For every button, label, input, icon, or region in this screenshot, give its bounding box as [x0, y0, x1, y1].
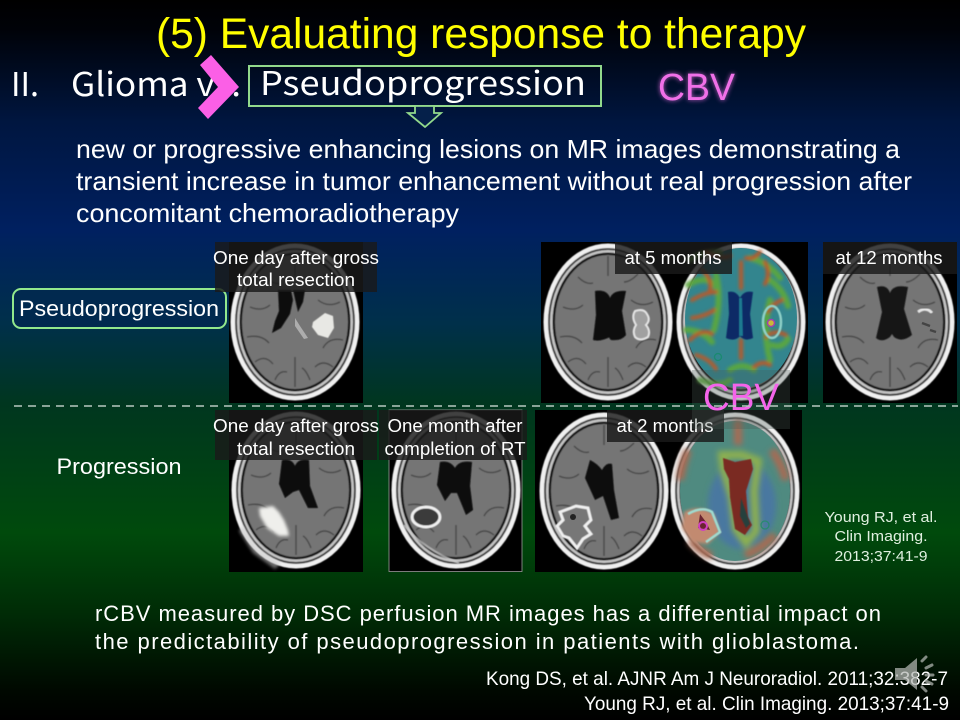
title: (5) Evaluating response to therapy: [156, 10, 806, 58]
definition text: new or progressive enhancing lesions on MR images demonstrating a: [76, 134, 901, 164]
citation: image source: Clin Imaging.: [834, 529, 928, 545]
citation: image source: 2013;37:41-9: [834, 549, 928, 565]
caption: at 5 months: [615, 242, 732, 274]
label: CBV glow: CBV: [658, 67, 736, 109]
subtitle: II.: [11, 58, 39, 106]
caption: one month after RT: [379, 410, 527, 460]
label: CBV glow: CBV: [658, 67, 736, 109]
conclusion text: the predictability of pseudoprogression in patients with glioblastoma.: [95, 629, 859, 654]
MRI: pseudoprogression, one day after resection: [229, 242, 363, 403]
definition text: concomitant chemoradiotherapy: [76, 198, 459, 228]
MRI: progression, one day after resection: [229, 410, 363, 572]
references: Kong DS, et al. AJNR Am J Neuroradiol. 2011;32:382-7: [486, 668, 948, 690]
caption: one month after RT: completion of RT: [384, 438, 526, 459]
MRI: progression, T1 at 2 months: [535, 410, 669, 572]
MRI: pseudoprogression, T1 at 5 months: [541, 242, 677, 403]
caption: one day after resection (progression): total resection: [237, 438, 355, 459]
caption: one day after resection (progression): [213, 410, 379, 460]
caption: at 12 months: [823, 242, 957, 274]
conclusion text: [95, 601, 881, 654]
row label: Progression: Progression: [56, 454, 182, 479]
caption: at 5 months: at 5 months: [624, 247, 722, 268]
definition text: transient increase in tumor enhancement without real progression after: [76, 166, 912, 196]
caption: one day after resection (pseudoprogression): [213, 242, 379, 292]
arrow: down from highlight box: [408, 106, 441, 127]
subtitle: Pseudoprogression: [260, 57, 586, 105]
caption: at 2 months: [607, 410, 724, 442]
icon: speaker: [895, 657, 933, 691]
dashed divider between rows: [14, 405, 958, 407]
subtitle: Glioma vs.: [71, 58, 241, 106]
CBV label over images: [692, 370, 790, 429]
conclusion text: rCBV measured by DSC perfusion MR images has a differential impact on: [95, 601, 881, 626]
references: [486, 668, 949, 715]
MRI: progression, CBV map at 2 months: [669, 410, 802, 572]
subtitle: [11, 57, 586, 106]
caption: one day after resection (pseudoprogression): total resection: [237, 269, 355, 290]
caption: one day after resection (progression): One day after gross: [213, 415, 379, 436]
definition text: [76, 134, 912, 228]
MRI: progression, one month after RT: [389, 410, 522, 572]
highlight box: Pseudoprogression: [249, 66, 601, 106]
row label: Pseudoprogression: [13, 289, 226, 328]
references: Young RJ, et al. Clin Imaging. 2013;37:41-9: [584, 693, 949, 715]
CBV label over images: CBV: [703, 377, 780, 419]
row label: Pseudoprogression: Pseudoprogression: [19, 296, 219, 321]
caption: one month after RT: One month after: [388, 415, 522, 436]
MRI: pseudoprogression, CBV map at 5 months: [676, 242, 808, 403]
chevron pointer: [198, 55, 239, 119]
caption: at 12 months: at 12 months: [836, 247, 942, 268]
caption: one day after resection (pseudoprogression): One day after gross: [213, 247, 379, 268]
citation: image source: [824, 510, 938, 565]
MRI: pseudoprogression, T1 at 12 months: [823, 242, 957, 403]
caption: at 2 months: at 2 months: [616, 415, 714, 436]
citation: image source: Young RJ, et al.: [824, 510, 938, 526]
